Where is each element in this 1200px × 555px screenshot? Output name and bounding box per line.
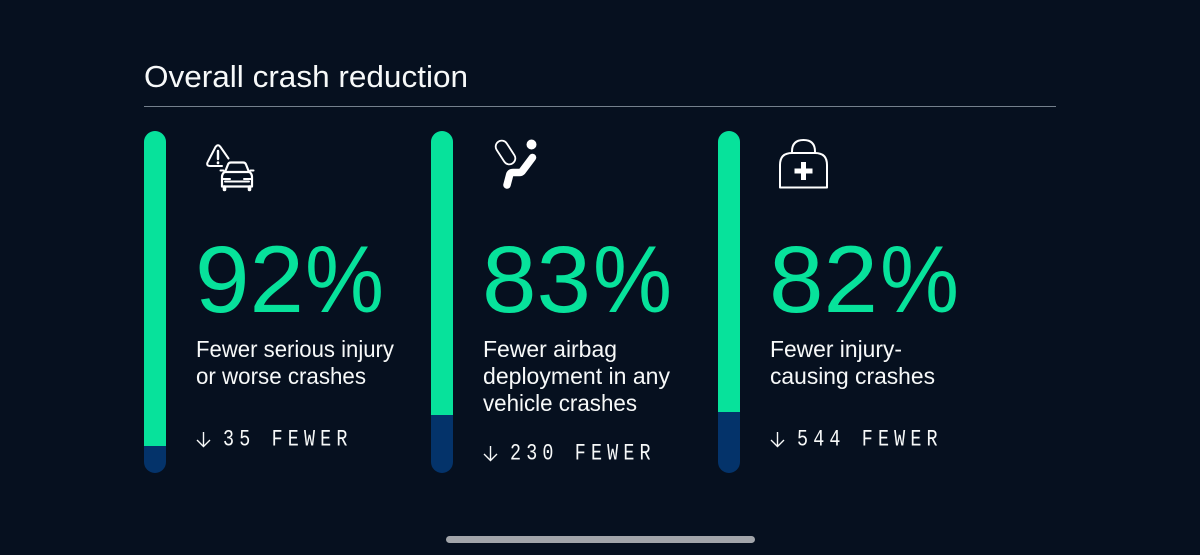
count: 544 fewer: 544 FEWER bbox=[797, 428, 943, 453]
description: or worse crashes bbox=[196, 363, 366, 389]
stat: 83%: % bbox=[593, 227, 672, 333]
stat: 92% bbox=[195, 227, 384, 333]
description: deployment in any bbox=[483, 363, 670, 389]
icon: airbag and seated person bbox=[493, 138, 536, 185]
panel: injury-causing crashes bbox=[718, 131, 959, 473]
stat: 83% bbox=[482, 227, 672, 333]
panel: serious injury crashes bbox=[144, 131, 394, 473]
count: 35 fewer: 35 FEWER bbox=[223, 428, 353, 453]
stat: 92%: 92 bbox=[195, 227, 304, 333]
home indicator bbox=[446, 536, 755, 543]
icon: medical bag bbox=[780, 140, 827, 188]
progress bar: 83% bbox=[431, 131, 453, 473]
description: Fewer serious injury bbox=[196, 336, 394, 362]
stat: 82% bbox=[769, 227, 959, 333]
count: 230 fewer: 230 FEWER bbox=[510, 442, 656, 467]
description bbox=[770, 336, 935, 389]
panel: airbag deployment crashes bbox=[431, 131, 672, 473]
stat: 92%: % bbox=[305, 227, 384, 333]
description: Fewer injury- bbox=[770, 336, 902, 362]
title: Overall crash reduction bbox=[144, 59, 468, 94]
progress bar: 92% bbox=[144, 131, 166, 473]
description bbox=[483, 336, 670, 416]
description: vehicle crashes bbox=[483, 390, 637, 416]
stat: 83%: 83 bbox=[482, 227, 591, 333]
description: Fewer airbag bbox=[483, 336, 617, 362]
stat: 82%: % bbox=[880, 227, 959, 333]
stat: 82%: 82 bbox=[769, 227, 878, 333]
icon: warning triangle and car bbox=[207, 145, 254, 190]
description bbox=[196, 336, 394, 389]
progress bar: 82% bbox=[718, 131, 740, 473]
description: causing crashes bbox=[770, 363, 935, 389]
